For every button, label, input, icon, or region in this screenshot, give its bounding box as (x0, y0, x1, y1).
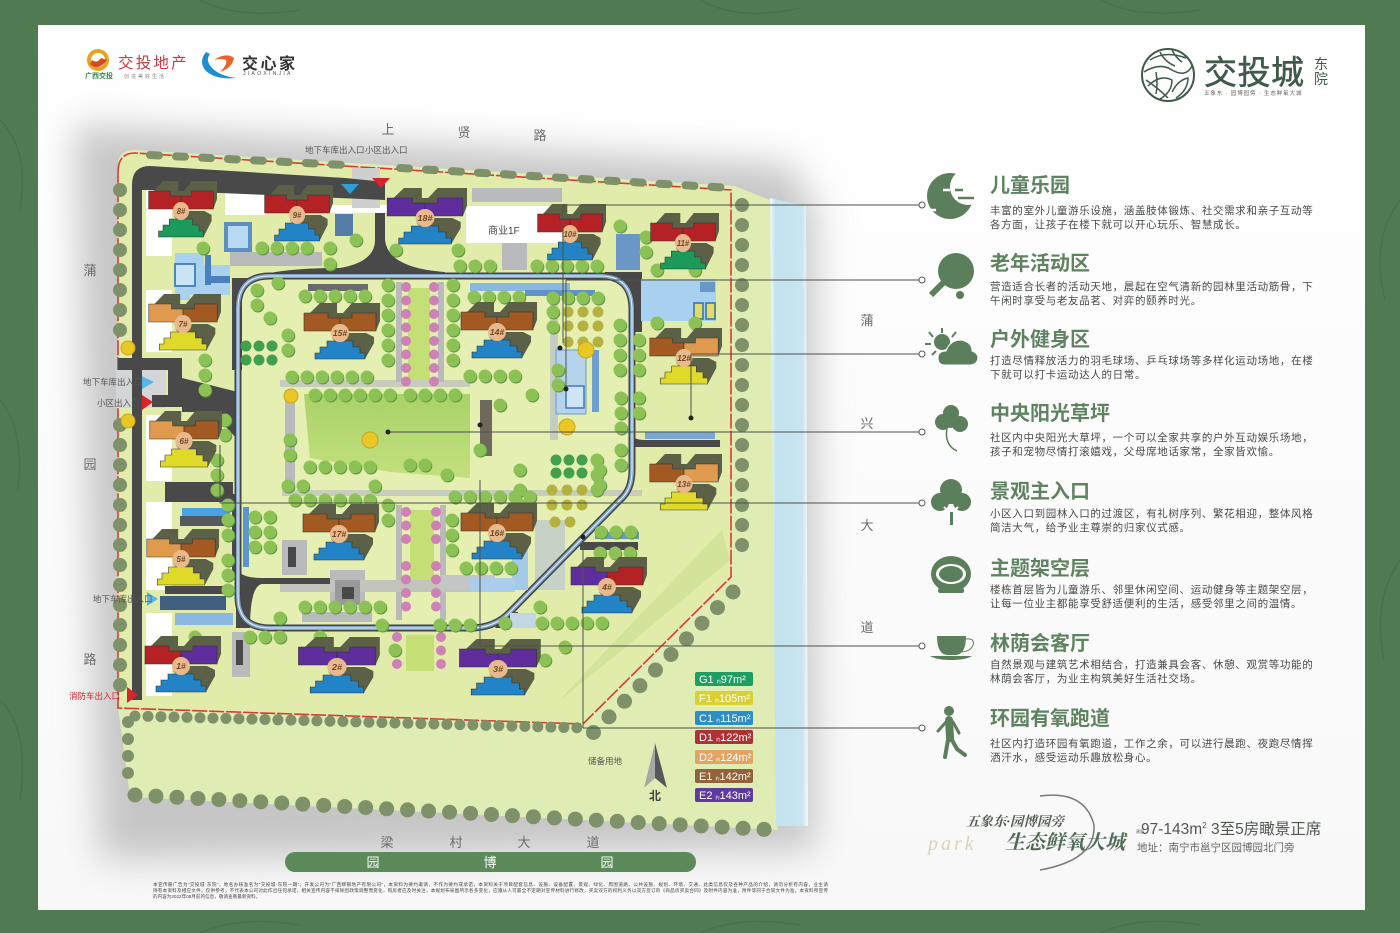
feature: themed stilt floor: 主题架空层 (990, 557, 1090, 580)
commercial block (466, 206, 562, 243)
building 13: 13# (677, 479, 691, 489)
slogan: park (926, 833, 977, 855)
logo: Jiaotou Real Estate: 创造美好生活 (124, 73, 166, 80)
logo: Jiaotou City East: 五象东 · 园博园旁 · 生态鲜氧大城 (1204, 89, 1302, 97)
icon: tree (931, 479, 971, 525)
canal (770, 198, 808, 826)
building 12 (650, 328, 722, 384)
road labels: 大 (860, 518, 874, 533)
slogan (926, 795, 1129, 870)
project summary: 2 (1202, 821, 1207, 830)
building 6: 6# (180, 436, 189, 446)
disclaimer: 持有本资料及相应文件，仅供参考，不代表本公司对此作出任何承诺，相关宣传内容不排除因政策调整而变化，购房者应及时关注，本规划布局图所示各多变化，应遵从人可最全不定期对宣传材料进行修改，买卖双方的权利义务以双方签订的《商品房买卖合同》及附件内容为准，附件等同于合同文件为准，本资料所宣传 (153, 887, 828, 894)
roads (118, 166, 720, 700)
logo: Jiaotou Real Estate: 广西交投 (85, 71, 113, 80)
building 4 (571, 557, 647, 613)
legend: E1 约142m² (699, 771, 751, 783)
icon: coffee cup (930, 636, 973, 660)
feature: central sunny lawn: 社区内中央阳光大草坪，一个可以全家共享的户外互动娱乐场地， (990, 431, 1313, 444)
building 17: 17# (332, 529, 346, 539)
legend: E2 约143m² (699, 790, 751, 802)
building 8: 8# (177, 207, 186, 216)
water features and play courts (160, 214, 716, 665)
feature: outdoor fitness: 户外健身区 (990, 327, 1090, 351)
building 5: 5# (177, 554, 186, 564)
building 8 (149, 181, 217, 237)
project summary (1136, 820, 1321, 854)
legend: D2 约124m² (699, 752, 752, 764)
project summary: 建面 (1136, 828, 1144, 834)
building 14 (461, 302, 537, 358)
feature: aerobic running track (938, 706, 1313, 764)
feature: outdoor fitness (925, 327, 1313, 381)
feature: seniors activity zone (931, 252, 1313, 307)
building 11: 11# (677, 239, 690, 248)
icon: helmet (931, 556, 971, 593)
project summary: 3至5房瞰景正席 (1207, 820, 1321, 838)
road labels: 大 (517, 835, 531, 850)
building 3: 3# (493, 664, 503, 674)
feature: outdoor fitness: 打造尽情释放活力的羽毛球场、乒乓球场等多样化运动场地，在楼 (990, 354, 1313, 367)
ring track (238, 276, 632, 628)
icon: clover (935, 405, 968, 451)
building 18 (387, 188, 467, 244)
entrance labels: 小区出入口 (365, 145, 408, 155)
logo: Jiaotou Real Estate (85, 51, 189, 80)
feature: shaded lounge: 林荫会客厅，为业主构筑美好生活社交场。 (990, 672, 1202, 685)
lawn diagonal band (560, 530, 730, 700)
feature: central sunny lawn: 孩子和宠物尽情打滚嬉戏，父母席地话家常，全家皆欢愉。 (990, 445, 1280, 458)
building 2 (298, 637, 380, 693)
building 10 (538, 204, 606, 260)
building 12: 12# (677, 353, 691, 363)
road labels: 路 (83, 652, 97, 667)
building 13 (650, 454, 722, 510)
boundary trees (120, 155, 775, 830)
road labels: 道 (860, 620, 874, 635)
icon: runner (938, 706, 965, 757)
road labels: 梁 (380, 835, 394, 850)
feature: themed stilt floor: 让每一位业主都能享受舒适便利的生活，感受邻里之间的温情。 (990, 597, 1302, 610)
feature: shaded lounge: 林荫会客厅 (990, 631, 1090, 655)
building 16: 16# (490, 528, 504, 538)
tree rows (196, 227, 711, 661)
building 2: 2# (331, 662, 342, 672)
building 9: 9# (293, 211, 302, 220)
feature: themed stilt floor: 楼栋首层皆为儿童游乐、邻里休闲空间、运动健身等主题架空层， (990, 583, 1313, 596)
feature: children playground (927, 169, 1313, 231)
feature: children playground: 儿童乐园 (990, 173, 1070, 197)
disclaimer: 本宣传册广告为“交投城·东院”，地名办核准名为“交投城·东院一期”，开发公司为“广西柳钢地产有限公司”，本资料为要约邀请，不作为要约或承诺，本资料关于项目配套信息、设施、设备配置、景观、绿化、周围道路、公共设施、规划、环境、交通、此类信息仅及各种产品的介绍，请勿分析有内容，业主请 (153, 881, 828, 888)
central lawn (304, 394, 470, 478)
building 9 (265, 185, 333, 241)
feature: landscaped main entrance: 简洁大气，给予业主尊崇的归家仪式感。 (990, 521, 1191, 534)
building 6 (150, 411, 222, 467)
logo: Jiaoxinjia (202, 52, 298, 78)
building 14: 14# (490, 327, 504, 337)
pink tree avenues and green strips (397, 287, 441, 671)
building 11 (651, 213, 719, 269)
feature: landscaped main entrance: 小区入口到园林入口的过渡区，有礼树序列、繁花相迎，整体风格 (990, 507, 1313, 520)
feature: themed stilt floor (931, 556, 1313, 610)
park name bar: 博 (483, 855, 497, 870)
road labels: 兴 (860, 416, 874, 431)
building 7: 7# (179, 319, 188, 329)
commercial block: 商业1F (488, 224, 520, 237)
building 10: 10# (564, 230, 577, 239)
road labels: 上 (381, 122, 395, 137)
feature: aerobic running track: 环园有氧跑道 (990, 707, 1110, 730)
icon: moon (927, 169, 986, 219)
road labels: 蒲 (860, 313, 874, 328)
white building pads (146, 187, 388, 696)
entrance markers (127, 178, 390, 703)
legend: C1 约115m² (699, 713, 751, 725)
feature: children playground: 各方面，让孩子在楼下就可以开心玩乐、智慧成长。 (990, 218, 1246, 231)
icon: sun and cloud (925, 328, 978, 365)
entrance labels: 地下车库出入口 (83, 377, 143, 387)
building 3 (459, 639, 541, 695)
slogan: 五象东·园博园旁 (966, 814, 1066, 829)
feature: outdoor fitness: 下就可以打卡运动达人的日常。 (990, 368, 1146, 381)
logo: Jiaoxinjia: 交心家 (242, 54, 298, 73)
inner site with red boundary (118, 153, 731, 724)
feature: landscaped main entrance: 景观主入口 (990, 480, 1090, 503)
map shadow: grey surroundings (75, 125, 815, 860)
disclaimer (153, 881, 828, 900)
legend: D1 约122m² (699, 732, 752, 744)
legend: F1 约105m² (699, 693, 750, 705)
legend (695, 672, 753, 802)
site plan (116, 150, 808, 830)
entrance labels: 小区出入口 (97, 398, 140, 408)
dark green and olive tree groves (246, 312, 600, 522)
feature: aerobic running track: 社区内打造环园有氧跑道，工作之余，可以进行晨跑、夜跑尽情挥 (990, 737, 1313, 750)
logo: Jiaotou City East (1142, 49, 1328, 101)
feature: children playground: 丰富的室外儿童游乐设施，涵盖肢体锻炼、社交需求和亲子互动等 (990, 204, 1313, 217)
north arrow (644, 743, 667, 803)
feature: landscaped main entrance (931, 479, 1313, 534)
icon: table tennis paddle (931, 253, 974, 299)
feature: aerobic running track: 洒汗水，感受运动乐趣放松身心。 (990, 751, 1157, 764)
north arrow: 北 (649, 789, 661, 803)
road labels: 蒲 (83, 263, 97, 278)
feature: seniors activity zone: 老年活动区 (990, 252, 1090, 275)
road labels: 路 (533, 128, 547, 143)
slogan: 生态鲜氧大城 (1005, 831, 1129, 854)
road labels: 道 (586, 835, 600, 850)
entrance labels: 地下车库出入口 (305, 145, 365, 155)
entrance labels: 消防车出入口 (69, 691, 120, 701)
grey paved paths (116, 168, 642, 677)
building 5 (147, 529, 219, 585)
park name bar (285, 852, 696, 872)
feature: central sunny lawn (935, 402, 1313, 458)
feature: seniors activity zone: 午闲时享受与老友品茗、对弈的颐养时光。 (990, 294, 1202, 307)
feature: shaded lounge: 自然景观与建筑艺术相结合，打造兼具会客、休憩、观赏等功能的 (990, 658, 1313, 671)
legend: G1 约97m² (699, 674, 746, 686)
building 7 (149, 294, 221, 350)
feature: central sunny lawn: 中央阳光草坪 (990, 402, 1110, 425)
road labels (83, 122, 874, 850)
connector lines (220, 202, 925, 731)
building 15 (304, 303, 380, 359)
building 4: 4# (601, 582, 612, 592)
building 16 (461, 503, 537, 559)
logo: Jiaotou City East: 交投城 (1204, 54, 1304, 91)
logo: Jiaotou Real Estate: 交投地产 (118, 54, 189, 72)
entrance labels: 储备用地 (588, 756, 623, 766)
building 18: 18# (418, 213, 433, 223)
logo: Jiaotou City East: 东 (1314, 56, 1328, 72)
entrance labels: 地下车库出入口 (93, 594, 153, 604)
entrance labels (69, 145, 623, 766)
logo: Jiaotou City East: 院 (1314, 71, 1328, 87)
feature: seniors activity zone: 营造适合长者的活动天地，晨起在空气清新的园林里活动筋骨，下 (990, 280, 1313, 293)
flowering yellow trees (121, 341, 594, 448)
disclaimer: 的内容为2022年08月前的信息，敬请查看最新资料。 (153, 893, 260, 900)
road labels: 园 (83, 457, 97, 472)
park name bar: 园 (366, 855, 380, 870)
road labels: 贤 (457, 125, 471, 140)
park name bar: 园 (600, 855, 614, 870)
project summary: 地址：南宁市邕宁区园博园北门旁 (1137, 841, 1294, 854)
building 1 (145, 636, 221, 692)
project summary: 97-143m (1141, 821, 1202, 838)
building 1: 1# (176, 661, 186, 671)
road labels: 村 (449, 835, 463, 850)
building 17 (303, 504, 379, 560)
ring interior (238, 276, 632, 628)
feature: shaded lounge (930, 631, 1313, 685)
logo: Jiaoxinjia: JIAOXINJIA (243, 71, 293, 77)
outer land (118, 150, 778, 830)
building 15: 15# (333, 328, 347, 338)
